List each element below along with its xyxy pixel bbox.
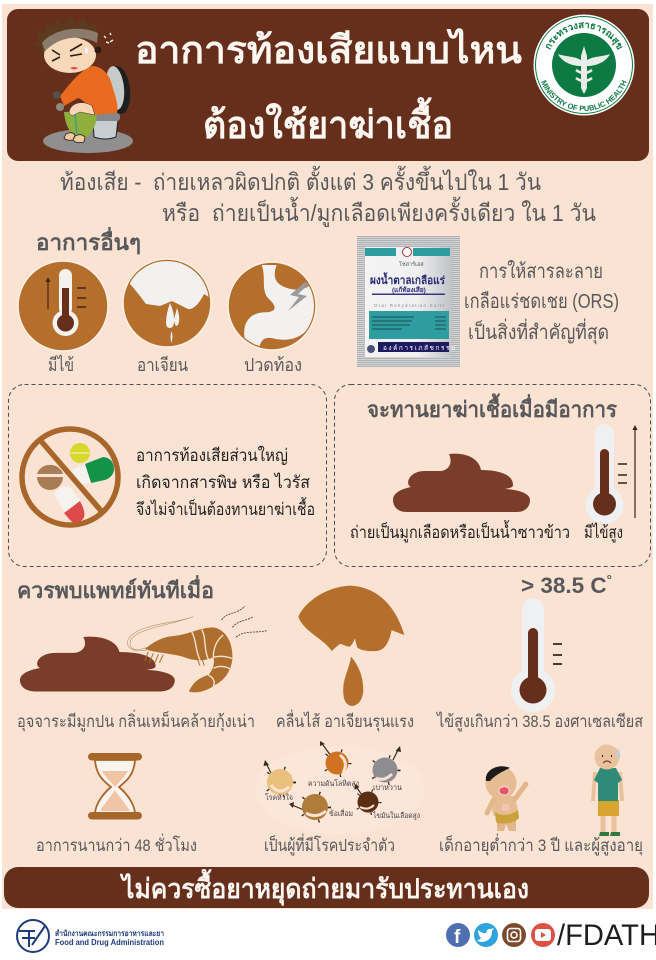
panel heading: จะทานยาฆ่าเชื้อเมื่อมีอาการ (367, 393, 617, 422)
ORS line 1: การให้สารละลาย (479, 260, 603, 283)
definition line 2: หรือ ถ่ายเป็นน้ำ/มูกเลือดเพียงครั้งเดียว ใน 1 วัน (162, 197, 596, 227)
heading: other symptoms: อาการอื่นๆ (36, 226, 141, 255)
icon: crying child (486, 766, 526, 831)
FDA name english: Food and Drug Administration (55, 938, 164, 947)
heading: see a doctor: ควรพบแพทย์ทันทีเมื่อ (17, 574, 214, 603)
icon: man on toilet (33, 17, 133, 153)
label: nausea, severe vomiting: คลื่นไส้ อาเจียนรุนแรง (276, 709, 414, 732)
germ label: arthritis: ข้อเสื่อม (329, 808, 353, 818)
germ label: high cholesterol: ไขมันในเลือดสูง (372, 811, 420, 820)
icon: facebook (446, 923, 470, 948)
germ: heart disease (264, 760, 294, 796)
germ: diabetes (371, 746, 401, 784)
definition line 1: ท้องเสีย - ถ่ายเหลวผิดปกติ ตั้งแต่ 3 ครั้งขึ้นไปใน 1 วัน (60, 166, 541, 195)
title: อาการท้องเสียแบบไหน (135, 28, 522, 72)
germ: hypertension (320, 741, 350, 776)
panel: when to take antibiotics (334, 384, 650, 566)
logo: FDA (17, 920, 164, 952)
social icons (446, 919, 656, 952)
label: fever: มีไข้ (48, 354, 74, 375)
icon: shrimp (127, 606, 267, 692)
header banner (7, 9, 649, 161)
icon: fever (18, 261, 108, 351)
label: stool with mucus, shrimp smell: อุจจาระมีมูกปน กลิ่นเหม็นคล้ายกุ้งเน่า (17, 709, 255, 732)
germ: arthritis (289, 792, 330, 822)
icon: stool with shrimp (20, 606, 267, 692)
label: vomiting: อาเจียน (137, 355, 188, 375)
icon: youtube (531, 923, 555, 947)
panel text line 3: จึงไม่จำเป็นต้องทานยาฆ่าเชื้อ (136, 497, 315, 519)
ORS text (464, 260, 619, 345)
germ label: heart disease: โรคหัวใจ (265, 793, 293, 802)
logo: ministry of public health: MINISTRY OF PUBLIC HEALTH (541, 80, 627, 111)
panel text line 2: เกิดจากสารพิษ หรือ ไวรัส (136, 472, 311, 492)
panel text line 1: อาการท้องเสียส่วนใหญ่ (136, 445, 288, 465)
label: high fever: มีไข้สูง (584, 522, 623, 543)
icon: no pills (22, 429, 118, 525)
germ label: diabetes: เบาหวาน (373, 783, 402, 792)
germ: high cholesterol (354, 784, 380, 814)
label: chronic disease: เป็นผู้ที่มีโรคประจำตัว (264, 833, 395, 856)
icon: stool with mucus (393, 454, 530, 512)
ORS line 2: เกลือแร่ชดเชย (ORS) (464, 291, 619, 313)
icon: stomach ache (228, 262, 317, 353)
icon: thermometer above 38.5 (511, 598, 562, 712)
icon: elderly man (593, 744, 622, 836)
icon: ORS packet: องค์การเภสัชกรรม (383, 344, 457, 352)
germ label: hypertension: ความดันโลหิตสูง (308, 779, 359, 788)
icon: twitter (474, 923, 498, 947)
icon: hourglass (88, 753, 142, 820)
temperature value: > 38.5 C (521, 573, 605, 598)
icon: chronic diseases (255, 741, 425, 834)
panel: no antibiotics needed (8, 384, 326, 566)
banner text: ไม่ควรซื้อยาหยุดถ่ายมารับประทานเอง (119, 868, 529, 906)
logo: ministry of public health: กระทรวงสาธารณสุข (546, 22, 622, 50)
icon: instagram (502, 923, 526, 947)
label: stomach ache: ปวดท้อง (244, 355, 302, 375)
icon: severe vomiting (298, 586, 404, 706)
logo: ministry of public health (534, 14, 634, 116)
FDA name thai: สำนักงานคณะกรรมการอาหารและยา (55, 929, 164, 938)
label: longer than 48 hours: อาการนานกว่า 48 ชั่วโมง (36, 833, 197, 855)
icon: vomiting (123, 254, 212, 347)
icon: ORS packet: ผงน้ำตาลเกลือแร่ (370, 272, 445, 287)
label: mucus stool: ถ่ายเป็นมูกเลือดหรือเป็นน้ำซาวข้าว (350, 520, 570, 543)
icon: ORS packet: Oral Rehydration Salts (374, 303, 446, 308)
bottom banner (4, 867, 649, 908)
icon: ORS packet: โซล่าร์เอส (399, 260, 424, 268)
icon: facebook: f (454, 927, 461, 948)
ORS line 3: เป็นสิ่งที่สำคัญที่สุด (468, 318, 609, 345)
temperature value: ° (607, 572, 612, 587)
icon: ORS packet (357, 236, 460, 367)
icon: ORS packet: (แก้ท้องเสีย) (392, 285, 426, 294)
title line 2: ต้องใช้ยาฆ่าเชื้อ (203, 97, 453, 147)
icon: high fever thermometer (586, 424, 638, 524)
